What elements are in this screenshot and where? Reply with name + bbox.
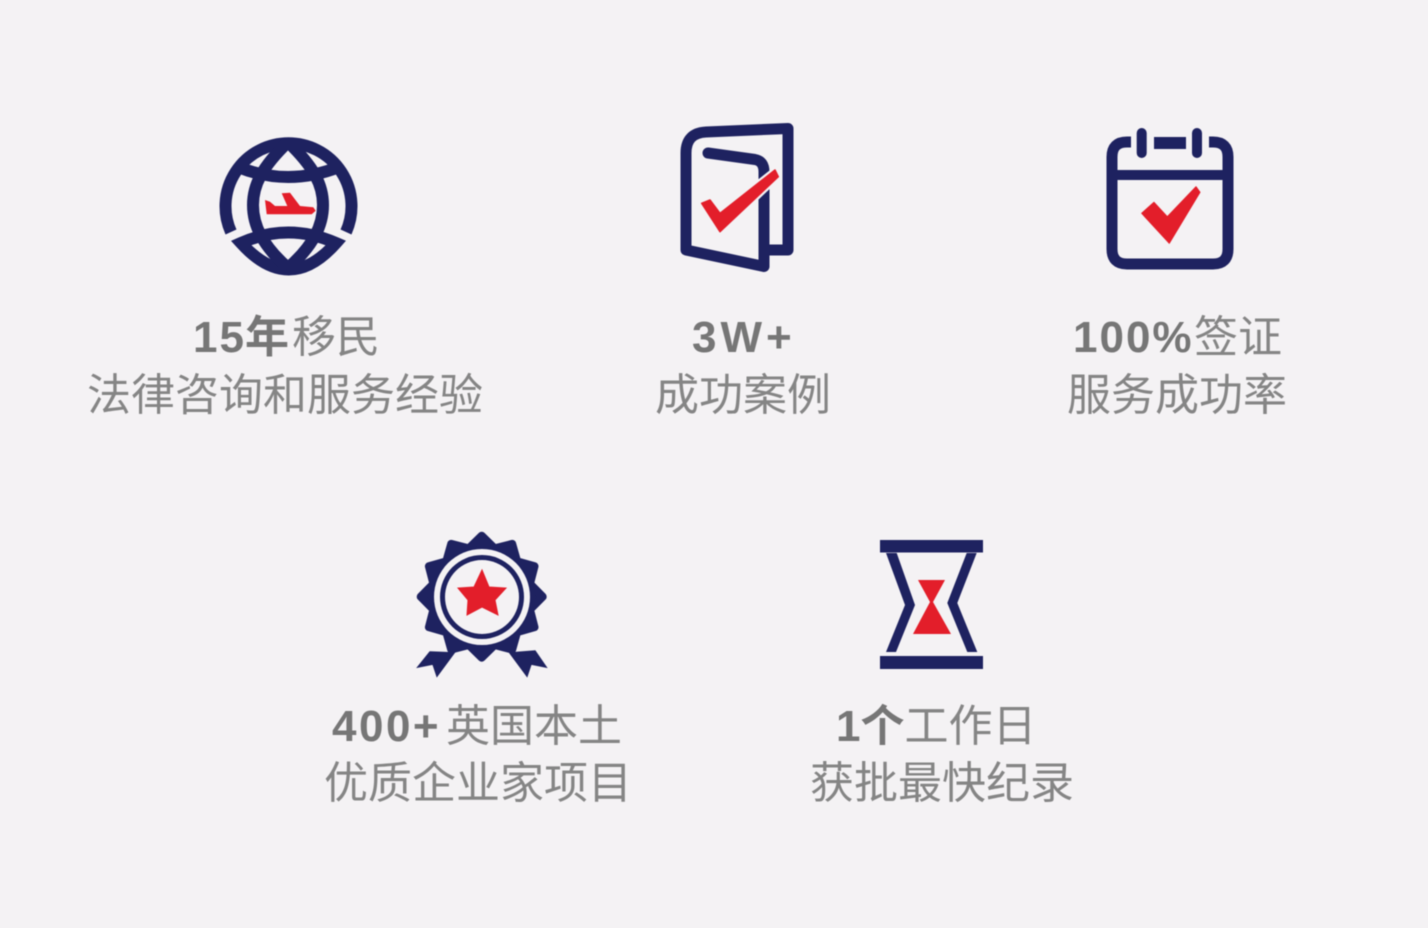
text: 100% success rate (1067, 313, 1287, 420)
icon: folder with check (686, 128, 788, 266)
text: 3W+ cases: 成功案例 (655, 371, 831, 420)
text: 100% success rate: 签证 (1194, 313, 1282, 362)
text: 400+ projects: 400+ (332, 702, 441, 751)
text: one working day: 获批最快纪录 (810, 759, 1074, 808)
text: 15 years experience (87, 313, 483, 420)
icon: globe with plane (226, 142, 352, 270)
text: one working day: 1个工作日 (836, 702, 1036, 751)
text: 400+ projects: 优质企业家项目 (324, 759, 632, 808)
text: 15 years experience: 移民 (292, 313, 380, 362)
text: 15 years experience: 15 (193, 313, 246, 362)
text: 15 years experience: 年 (245, 313, 289, 362)
text: 400+ projects: 英国本土 (446, 702, 622, 751)
text: 3W+ cases (655, 313, 831, 420)
text: 100% success rate: 服务成功率 (1067, 371, 1287, 420)
icon: award badge with star (418, 536, 546, 676)
text: 400+ projects (324, 702, 632, 808)
text: 100% success rate: 100% (1073, 313, 1194, 362)
text: 3W+ cases: 3W+ (692, 313, 796, 362)
text: 15 years experience: 法律咨询和服务经验 (87, 371, 483, 420)
icon: hourglass (880, 540, 983, 669)
text: one working day (810, 702, 1074, 808)
icon: calendar with check (1112, 133, 1228, 264)
